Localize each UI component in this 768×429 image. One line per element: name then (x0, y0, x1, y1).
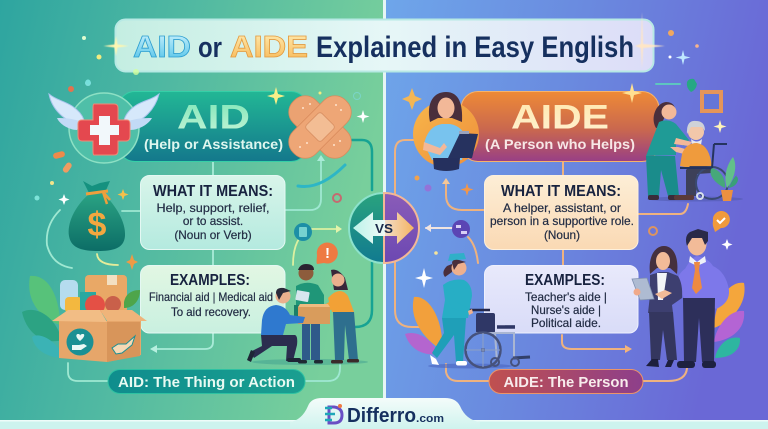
label: AIDE The Person: AIDE: The Person (504, 374, 628, 391)
woman (320, 270, 359, 364)
icon: money bag: $ (88, 206, 107, 244)
icon: crossed bandage (283, 90, 357, 164)
illustration: leaves left (22, 276, 64, 358)
VS badge (349, 193, 419, 263)
logo text: Differro (347, 405, 416, 427)
illustration: business woman with tablet (632, 246, 682, 367)
heading: examples: EXAMPLES: (170, 272, 250, 289)
background: right blue panel (385, 0, 768, 421)
label: AIDE The Person (489, 370, 643, 394)
panel: AID examples (140, 266, 285, 333)
icon: nurse with clipboard in circle (413, 92, 479, 171)
icon: list badge (452, 220, 470, 238)
icon: Differro D mark (325, 404, 342, 423)
seated man (674, 121, 712, 200)
icon: alert bubble (317, 243, 338, 264)
standing man (294, 264, 324, 364)
illustration: leaves right panel left (405, 297, 442, 354)
icon: money bag (69, 181, 125, 251)
panel: AIDE header (461, 92, 659, 162)
panel: AIDE meaning (484, 176, 638, 250)
title: AID: AID (133, 29, 191, 64)
subheading: A Person who Helps: (A Person who Helps) (485, 136, 635, 152)
footer strip (0, 421, 768, 429)
illustration: donation box (52, 275, 147, 362)
left panel connector lines (47, 140, 372, 381)
text: meaning body: Help, support, relief, (156, 201, 270, 215)
text: meaning body: A helper, assistant, or (503, 201, 621, 215)
illustration: caregiver and man in wheelchair (646, 102, 743, 202)
icon: winged medical cross (49, 93, 159, 163)
footer logo tab (290, 398, 480, 429)
illustration: leaves right panel right (714, 283, 745, 358)
icon: check bubble (713, 211, 730, 232)
wheelchair (466, 310, 530, 368)
title: Explained in Easy English: Explained in Easy English (316, 31, 634, 64)
title banner (116, 20, 654, 72)
carried box (298, 307, 330, 324)
heading: what it means: WHAT IT MEANS: (501, 183, 621, 200)
icon: clipboard badge (294, 223, 312, 241)
caregiver (646, 102, 692, 200)
text: examples body: Teacher's aide | (525, 290, 607, 304)
panel: AIDE examples (484, 266, 638, 333)
illustration: nurse pushing wheelchair (428, 253, 530, 368)
heading: examples: EXAMPLES: (525, 272, 605, 289)
text: examples body: Political aide. (531, 316, 601, 330)
left decorative sparkles and pills (34, 80, 370, 270)
sparkles left and right of title (82, 12, 699, 86)
subheading: Help or Assistance: (Help or Assistance) (144, 136, 283, 152)
label: AID The Thing or Action: AID: The Thing or Action (118, 374, 295, 391)
label: AID The Thing or Action (108, 370, 305, 394)
icon: alert bubble: ! (325, 245, 330, 262)
background: left green panel (0, 0, 383, 421)
heading: AID: AID (177, 98, 250, 136)
kneeling man (247, 288, 305, 362)
right decorative sparkles and badges (402, 79, 732, 288)
wheelchair (680, 144, 728, 199)
illustration: business man (677, 229, 729, 368)
text: examples body: Financial aid | Medical aid (149, 290, 273, 304)
potted plant (711, 157, 738, 201)
title: AIDE: AIDE (230, 29, 308, 64)
nurse (430, 253, 473, 366)
panel: AID header (118, 92, 308, 162)
VS badge: VS (375, 221, 393, 236)
text: meaning body: person in a supportive role. (490, 214, 634, 228)
title: or: or (198, 32, 222, 64)
text: meaning body: (Noun) (544, 228, 580, 242)
right panel connector lines (395, 84, 688, 381)
logo suffix: .com (416, 413, 444, 425)
panel: AID meaning (140, 176, 285, 250)
text: examples body: To aid recovery. (171, 305, 251, 319)
text: meaning body: or to assist. (183, 214, 243, 228)
text: meaning body: (Noun or Verb) (174, 228, 252, 242)
illustration: three helpers with box (247, 264, 368, 365)
heading: AIDE: AIDE (511, 98, 609, 136)
text: examples body: Nurse's aide | (531, 303, 601, 317)
heading: what it means: WHAT IT MEANS: (153, 183, 273, 200)
